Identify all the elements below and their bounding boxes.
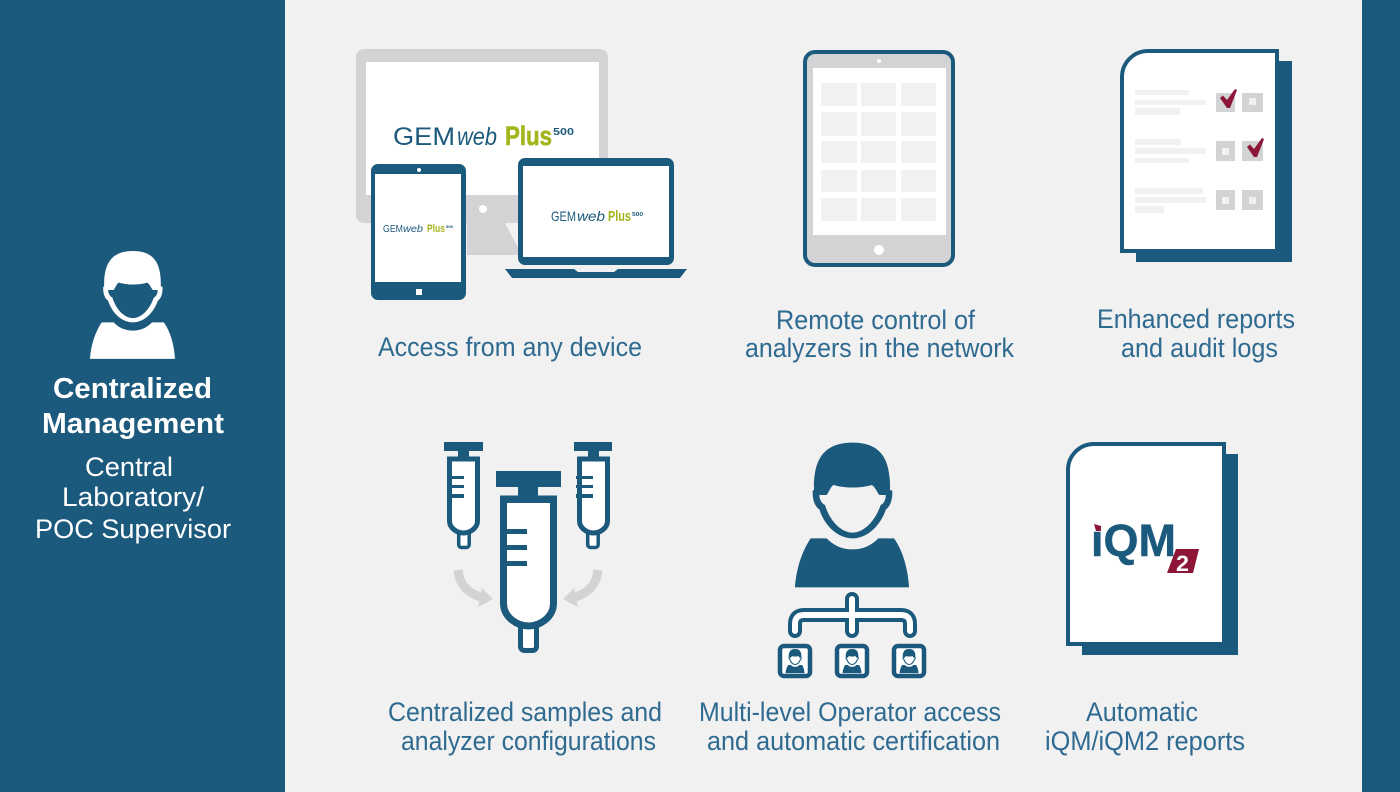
iQM2 logo: iQM xyxy=(1091,515,1176,566)
iQM2 logo xyxy=(1091,515,1199,576)
panel: left sidebar xyxy=(0,0,285,792)
center syringe xyxy=(496,471,561,650)
icon: tablet with grid xyxy=(805,52,953,265)
tablet logo: 500 xyxy=(446,224,454,229)
sidebar heading: Centralized xyxy=(53,373,212,405)
label: centralized samples xyxy=(388,697,662,756)
label: multi-level operator access: and automatic certification xyxy=(707,726,1000,756)
monitor logo: web xyxy=(457,123,497,151)
laptop logo: GEM xyxy=(551,208,576,224)
icon: supervisor xyxy=(90,251,175,359)
sidebar heading xyxy=(42,373,225,440)
icon: report checklist xyxy=(1122,51,1292,262)
left syringe xyxy=(444,442,483,548)
label: centralized samples: analyzer configurations xyxy=(401,726,656,756)
laptop logo: 500 xyxy=(632,212,643,218)
label: automatic reports xyxy=(1045,697,1245,756)
monitor logo: GEM xyxy=(393,123,455,151)
sidebar subheading: Laboratory/ xyxy=(62,482,205,512)
org chart connector xyxy=(795,599,910,631)
label: access from any device: Access from any device xyxy=(378,332,642,362)
label: remote control: analyzers in the network xyxy=(745,333,1015,363)
laptop logo: Plus xyxy=(608,208,631,225)
icon: iQM2 document xyxy=(1068,444,1238,655)
tablet logo: Plus xyxy=(427,223,445,235)
label: enhanced reports xyxy=(1097,304,1295,363)
label: multi-level operator access xyxy=(699,697,1001,756)
label: enhanced reports: and audit logs xyxy=(1121,333,1278,363)
iQM2 logo: 2 xyxy=(1176,551,1189,576)
label: multi-level operator access: Multi-level Operator access xyxy=(699,697,1001,727)
tablet logo xyxy=(383,223,454,235)
panel: right edge band xyxy=(1362,0,1400,792)
tablet logo: web xyxy=(403,224,423,235)
right syringe xyxy=(574,442,612,548)
monitor logo: Plus xyxy=(505,121,552,151)
label: enhanced reports: Enhanced reports xyxy=(1097,304,1295,334)
monitor xyxy=(356,49,608,255)
icon: devices xyxy=(356,49,687,300)
laptop xyxy=(505,158,687,278)
sidebar heading: Management xyxy=(42,408,225,440)
operator card 2 xyxy=(837,646,867,676)
laptop logo xyxy=(551,208,643,225)
sidebar subheading: Central xyxy=(85,452,173,482)
label: remote control: Remote control of xyxy=(776,305,976,335)
tablet logo: GEM xyxy=(383,224,403,235)
sidebar subheading: POC Supervisor xyxy=(35,514,231,544)
sidebar subheading xyxy=(35,452,231,544)
icon: operator hierarchy xyxy=(780,443,924,676)
laptop logo: web xyxy=(577,208,605,224)
icon: syringes xyxy=(444,442,612,650)
label: centralized samples: Centralized samples and xyxy=(388,697,662,727)
arrows xyxy=(458,570,598,607)
label: automatic reports: Automatic xyxy=(1086,697,1198,727)
operator card 1 xyxy=(780,646,810,676)
checkmarks xyxy=(1220,89,1264,157)
monitor logo: 500 xyxy=(553,127,575,138)
label: automatic reports: iQM/iQM2 reports xyxy=(1045,726,1245,756)
label: remote control xyxy=(745,305,1015,363)
operator card 3 xyxy=(894,646,924,676)
tablet xyxy=(371,164,466,300)
monitor logo xyxy=(393,121,575,151)
operator figure xyxy=(795,443,909,587)
